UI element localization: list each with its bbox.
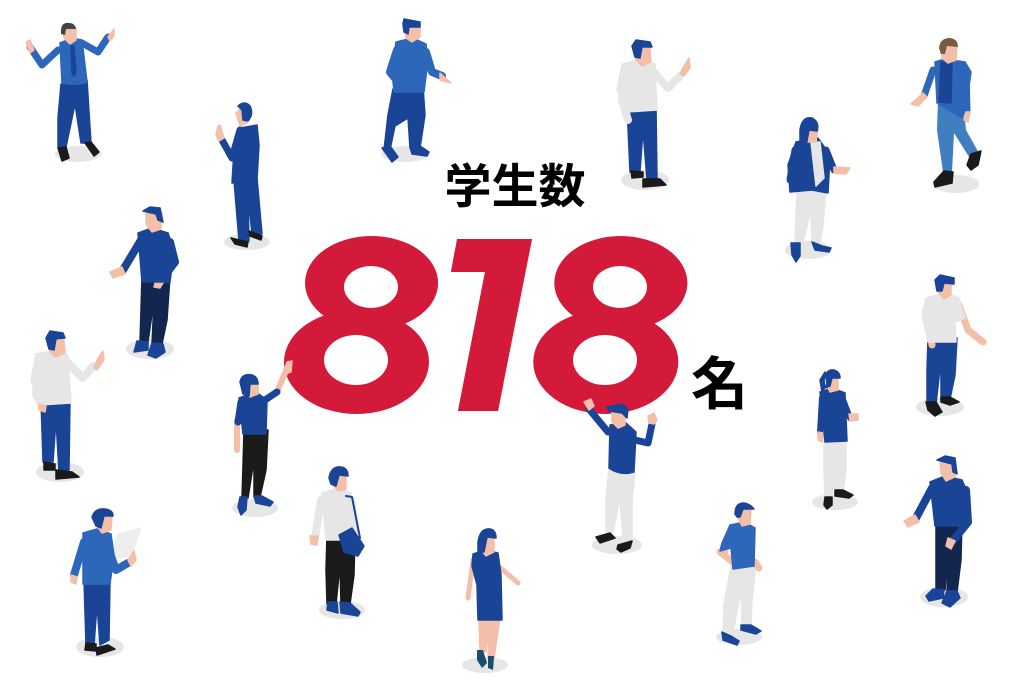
figure: man in navy suit, seen from behind bbox=[216, 103, 270, 250]
figure: man with cap, arms raised bbox=[584, 399, 657, 554]
figure: woman in navy jacket bbox=[785, 118, 850, 262]
figure: man in open jacket walking bbox=[911, 38, 981, 193]
big number 818: 1 bbox=[358, 183, 580, 466]
big number 818: 8 bbox=[280, 189, 443, 461]
figure: man in blue tee, hands on hips bbox=[716, 503, 762, 645]
figure: woman with ponytail bbox=[812, 370, 858, 510]
big number 818: 8 bbox=[529, 189, 692, 461]
figure: man in blue shirt, walking bbox=[381, 19, 451, 162]
heading: student count: 学生数 bbox=[444, 160, 586, 213]
figure: man in white tee bbox=[916, 275, 983, 416]
figure: man in white shirt, pointing bbox=[31, 331, 104, 482]
figure: man in navy sweater, gesturing bbox=[904, 456, 970, 607]
figure: man with shoulder bag bbox=[310, 467, 365, 619]
figure: man in navy sweater and dark trousers bbox=[110, 207, 175, 359]
figure: man in white shirt, pointing right bbox=[617, 40, 690, 190]
figure: man with tie, arms raised bbox=[26, 23, 114, 162]
big number 818 bbox=[284, 236, 688, 414]
figure: woman reaching up to the number bbox=[232, 361, 292, 517]
figure: woman in navy dress bbox=[462, 529, 518, 673]
unit label: 名 bbox=[691, 353, 748, 417]
figure: man in blue shirt holding paper bbox=[71, 509, 142, 657]
